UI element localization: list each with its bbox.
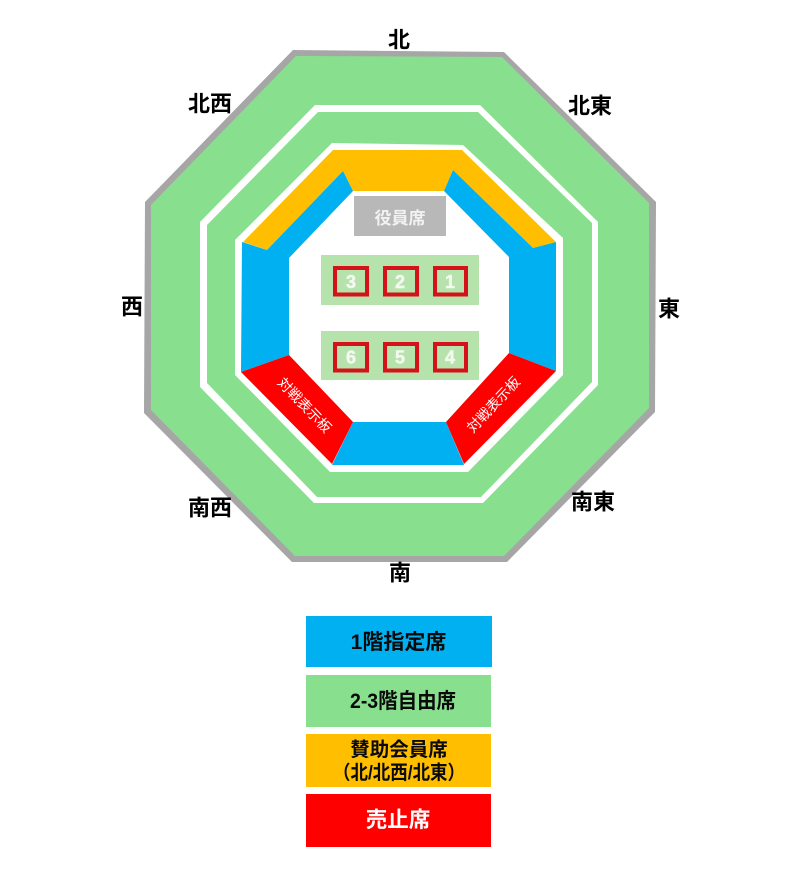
legend: first floor reserved seats bbox=[306, 616, 492, 667]
arena diagram bbox=[144, 50, 656, 562]
inner court area bbox=[235, 143, 563, 472]
courts 6, 5, 4: 4 bbox=[445, 348, 455, 368]
legend: second and third floor free seats bbox=[306, 675, 491, 727]
legend: first floor reserved seats: 1階指定席 bbox=[351, 631, 446, 654]
direction labels: 北西 bbox=[188, 92, 232, 116]
legend: unsold seats bbox=[306, 794, 491, 847]
legend: supporter member seats: 賛助会員席 bbox=[350, 739, 448, 761]
legend: supporter member seats bbox=[306, 734, 491, 787]
unsold seats with scoreboard, southeast bbox=[446, 353, 556, 464]
direction labels: 北 bbox=[388, 28, 410, 52]
unsold seats with scoreboard, southwest: 対戦表示板 bbox=[275, 374, 335, 436]
direction labels: 南西 bbox=[188, 496, 232, 520]
upper floor free seating, inner ring bbox=[207, 112, 592, 497]
courts 6, 5, 4 bbox=[321, 331, 479, 380]
reserved seats, east bbox=[444, 170, 556, 371]
upper floor free seating, outer ring bbox=[151, 56, 649, 556]
unsold seats with scoreboard, southeast: 対戦表示板 bbox=[464, 374, 523, 436]
direction labels: 北東 bbox=[568, 94, 612, 118]
legend: second and third floor free seats: 2-3階自由席 bbox=[350, 690, 456, 713]
reserved seats, south bbox=[332, 422, 464, 465]
supporter seats, north bbox=[243, 150, 556, 250]
officials' seats bbox=[354, 196, 446, 236]
direction labels: 東 bbox=[658, 296, 680, 322]
courts 6, 5, 4: 5 bbox=[395, 348, 405, 368]
reserved seats, west bbox=[241, 171, 353, 372]
legend bbox=[306, 616, 492, 847]
outer octagon border bbox=[144, 50, 656, 562]
direction labels: 南 bbox=[389, 560, 411, 586]
courts 3, 2, 1: 3 bbox=[346, 272, 356, 292]
direction labels: 南東 bbox=[571, 490, 615, 514]
direction labels: 西 bbox=[121, 294, 143, 320]
courts 6, 5, 4: 6 bbox=[346, 348, 356, 368]
legend: supporter member seats: （北/北西/北東） bbox=[333, 762, 465, 784]
courts 3, 2, 1 bbox=[321, 255, 479, 305]
courts 3, 2, 1: 2 bbox=[395, 272, 405, 292]
white ring divider bbox=[200, 105, 598, 503]
legend: unsold seats: 売止席 bbox=[366, 808, 430, 832]
courts 3, 2, 1: 1 bbox=[445, 272, 455, 292]
unsold seats with scoreboard, southwest bbox=[241, 355, 353, 464]
officials' seats: 役員席 bbox=[374, 209, 426, 228]
direction labels bbox=[121, 28, 680, 586]
